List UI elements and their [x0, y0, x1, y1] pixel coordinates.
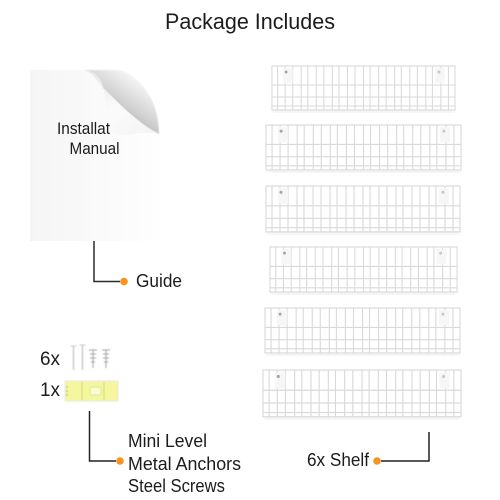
title: Package Includes: [165, 9, 335, 34]
manual text: Installat: [57, 120, 110, 138]
connector: hardware: [90, 411, 124, 465]
shelf 6: [263, 370, 461, 420]
shelf 4: [270, 247, 457, 295]
connector: shelf: [373, 432, 429, 465]
label: 1x: 1x: [40, 380, 60, 401]
label: hardware list: Mini Level: [128, 431, 207, 451]
label: guide: Guide: [136, 271, 182, 291]
shelf 2: [266, 125, 461, 173]
icon: installation manual sheet: [30, 70, 159, 241]
page curl: [85, 70, 159, 136]
icon: mini level: [65, 381, 118, 401]
label: 6x shelf: 6x Shelf: [307, 450, 370, 470]
shelf 3: [266, 186, 460, 235]
label: hardware list: Steel Screws: [128, 476, 225, 496]
manual text: Manual: [70, 140, 120, 158]
shelf 1: [272, 66, 455, 113]
icon: screws and anchors: [70, 345, 110, 370]
label: hardware list: Metal Anchors: [128, 454, 241, 474]
label: 6x: 6x: [40, 349, 60, 370]
shelf 5: [265, 308, 460, 356]
connector: guide: [94, 241, 128, 285]
